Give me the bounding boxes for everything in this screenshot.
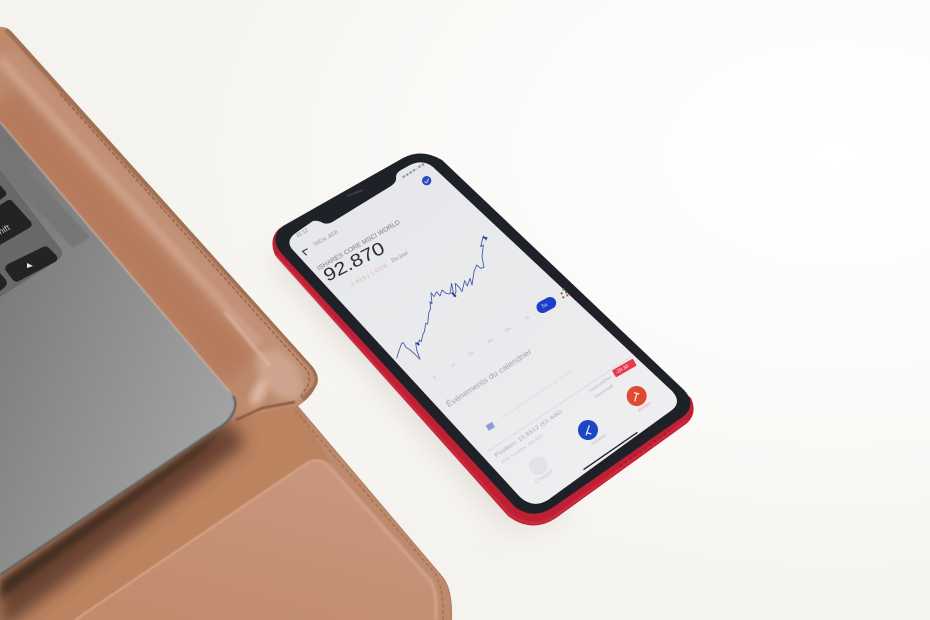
flap corner pink area — [254, 348, 306, 402]
case shading bands — [0, 29, 452, 620]
laptop front edge — [0, 396, 235, 575]
range labels: 1a — [523, 314, 531, 321]
red phone body — [272, 170, 694, 526]
normal label: Normal — [593, 383, 614, 399]
panel: leather case — [0, 27, 452, 620]
red value badge — [612, 359, 637, 377]
band beside laptop — [0, 100, 240, 370]
range pill 5a — [534, 295, 558, 315]
flap outer dark rim — [6, 29, 317, 400]
ticker label: IWDA .AEB — [313, 229, 340, 248]
phone shadow — [268, 240, 570, 530]
key: bottom left — [0, 273, 7, 291]
position text: Position: 15.8312 (€1.446) — [494, 409, 564, 459]
change label: Changer — [534, 469, 555, 485]
change icon — [529, 456, 548, 475]
range labels: 1m — [467, 349, 475, 357]
red value badge: -28.38 — [615, 363, 630, 376]
back chevron — [303, 249, 308, 255]
key: shift — [0, 200, 32, 245]
fund name: ISHARES CORE MSCI WORLD — [316, 219, 402, 272]
corner fold highlight — [247, 376, 271, 408]
speaker holes — [620, 431, 670, 466]
laptop body — [0, 122, 235, 575]
keyboard well — [0, 170, 62, 297]
price: 92.870 — [320, 238, 388, 286]
line chart — [397, 236, 487, 359]
laptop rear highlight edge — [0, 122, 230, 392]
check badge — [422, 176, 431, 185]
panel: smartphone — [272, 153, 694, 526]
range labels: 1s — [450, 362, 456, 368]
range labels: 6m — [504, 325, 512, 333]
panel: laptop — [0, 122, 235, 575]
calendar icon — [486, 422, 495, 431]
flap highlight ridge — [0, 58, 262, 345]
flap stitching — [60, 94, 309, 398]
laptop contact shadow on leather — [0, 424, 228, 600]
status icons — [403, 163, 425, 177]
key: top — [0, 185, 6, 200]
range labels: 3m — [486, 337, 494, 344]
crease line — [75, 460, 327, 620]
notch speaker — [347, 190, 363, 196]
speaker grille — [0, 140, 90, 248]
pocket edge light — [327, 464, 436, 620]
no events text: Pas d'événements à venir — [501, 368, 574, 420]
mid leather band — [0, 406, 340, 620]
phone screen content — [295, 163, 653, 485]
red body lower sheen — [277, 256, 686, 523]
average price text: Prix moyen: 64.464 — [500, 432, 545, 465]
laptop soft shadow on leather — [0, 420, 245, 620]
range pill 5a: 5a — [541, 302, 549, 310]
screen — [289, 162, 677, 504]
day change: -1.515 | 1.61% — [348, 263, 389, 289]
chart cursor dots — [417, 237, 487, 345]
buy button — [578, 420, 598, 440]
today label: Aujourd'hui — [588, 374, 613, 393]
black bezel — [275, 153, 690, 514]
buy label: Acheter — [590, 432, 608, 447]
home indicator — [584, 433, 637, 469]
lower pocket — [75, 460, 436, 620]
case base shape — [0, 27, 452, 620]
fold shadow — [236, 402, 295, 420]
range labels: 1j — [431, 374, 437, 380]
flap outer strip — [12, 52, 288, 354]
sell label: Vendre — [636, 400, 653, 414]
lower seam stitching — [295, 410, 443, 620]
arrow glyph — [27, 263, 33, 268]
day change caption: Du jour — [391, 250, 410, 264]
key: arrow — [5, 246, 57, 282]
sell button — [627, 386, 647, 406]
range labels — [431, 314, 531, 380]
candlestick toggle icon — [560, 288, 568, 298]
calendar heading: Événements du calendrier — [444, 346, 533, 409]
ridge bright end — [225, 312, 270, 366]
check glyph — [424, 179, 429, 183]
lower outer rim — [298, 406, 452, 620]
divider — [487, 357, 631, 452]
status bar clock: 11:12 — [295, 228, 310, 239]
